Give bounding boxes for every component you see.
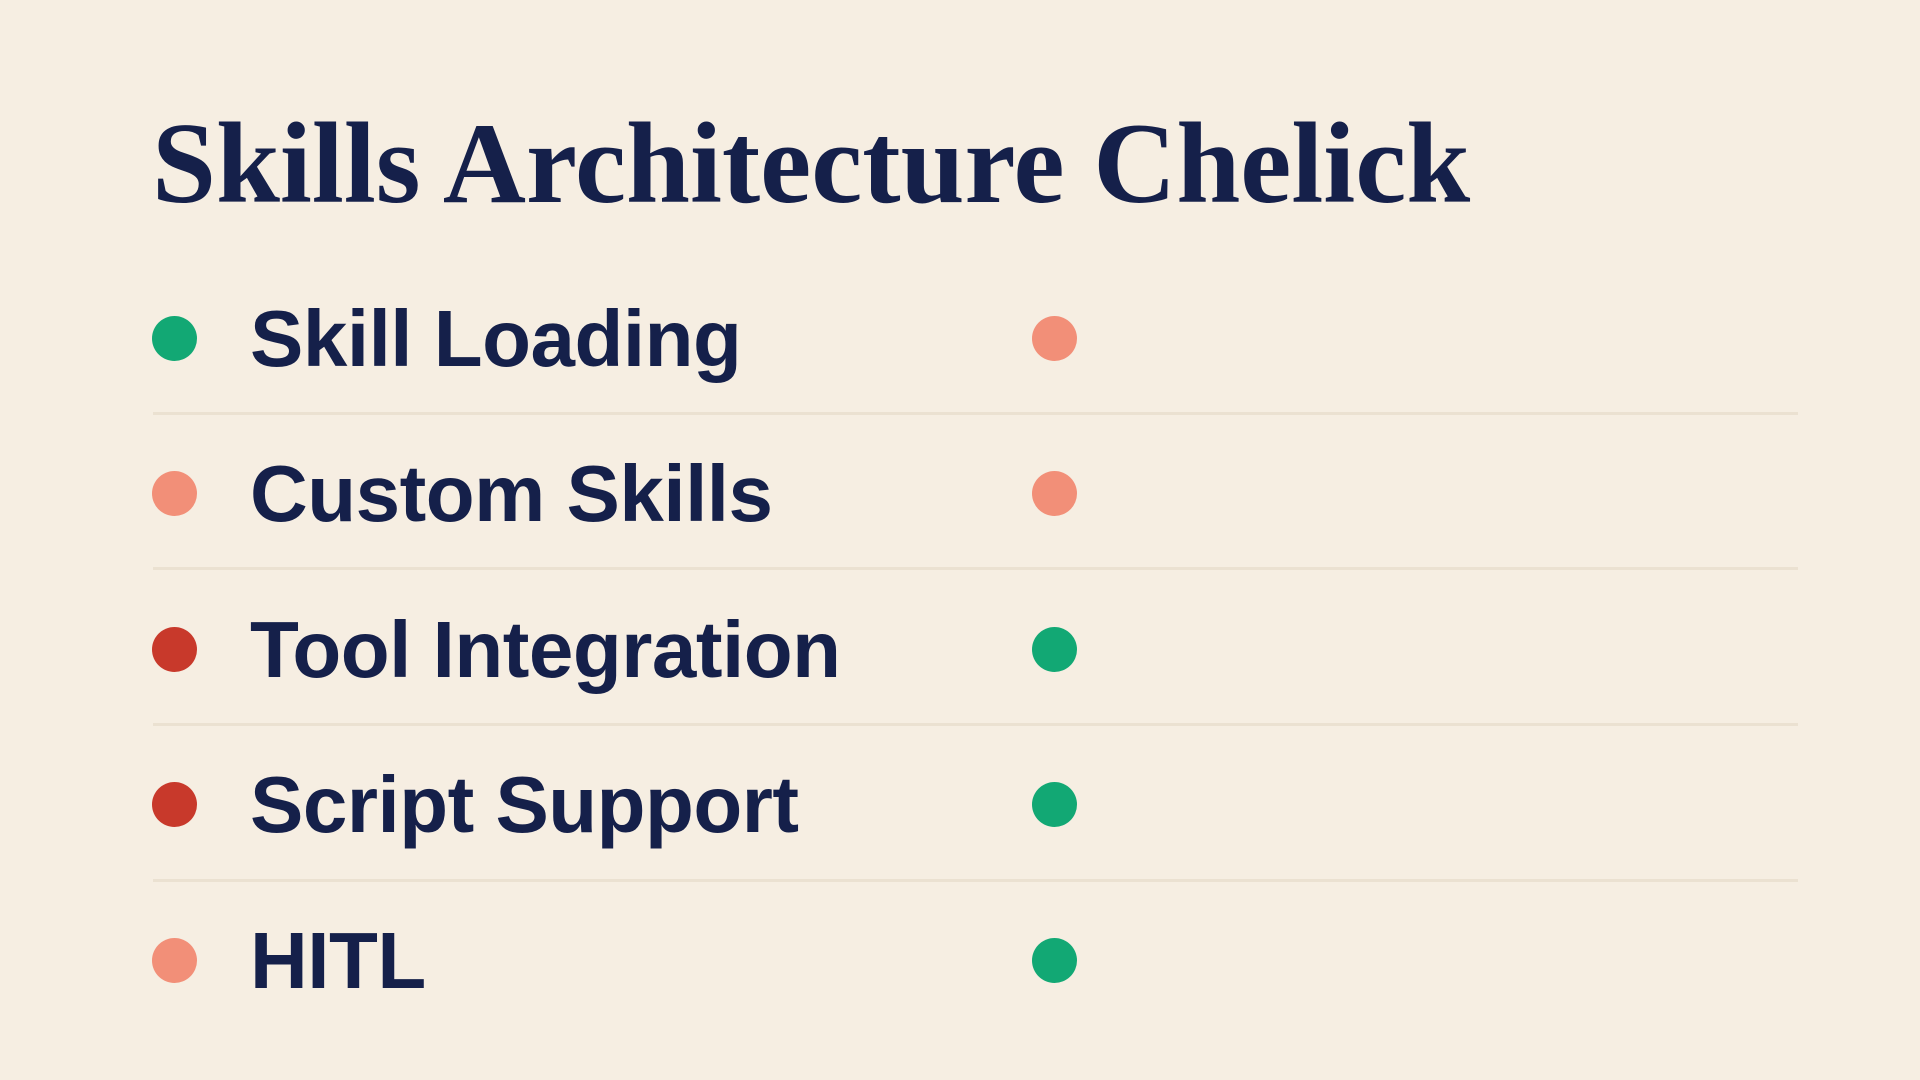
row: Skill Loading — [152, 294, 1077, 383]
row: Script Support — [152, 760, 1077, 849]
second status dot: green — [1032, 627, 1077, 672]
label: Custom Skills — [250, 449, 773, 538]
label: Skill Loading — [250, 294, 741, 383]
status dot: salmon — [152, 471, 197, 516]
label: HITL — [250, 916, 426, 1005]
label: Script Support — [250, 760, 799, 849]
second status dot: green — [1032, 782, 1077, 827]
label: Tool Integration — [250, 605, 840, 694]
status dot: green — [152, 316, 197, 361]
second status dot: salmon — [1032, 316, 1077, 361]
title: Skills Architecture Chelick — [152, 100, 1470, 227]
row: Custom Skills — [152, 449, 1077, 538]
second status dot: salmon — [1032, 471, 1077, 516]
second status dot: green — [1032, 938, 1077, 983]
status dot: red — [152, 782, 197, 827]
status dot: salmon — [152, 938, 197, 983]
row: Tool Integration — [152, 605, 1077, 694]
row: HITL — [152, 916, 1077, 1005]
status dot: red — [152, 627, 197, 672]
